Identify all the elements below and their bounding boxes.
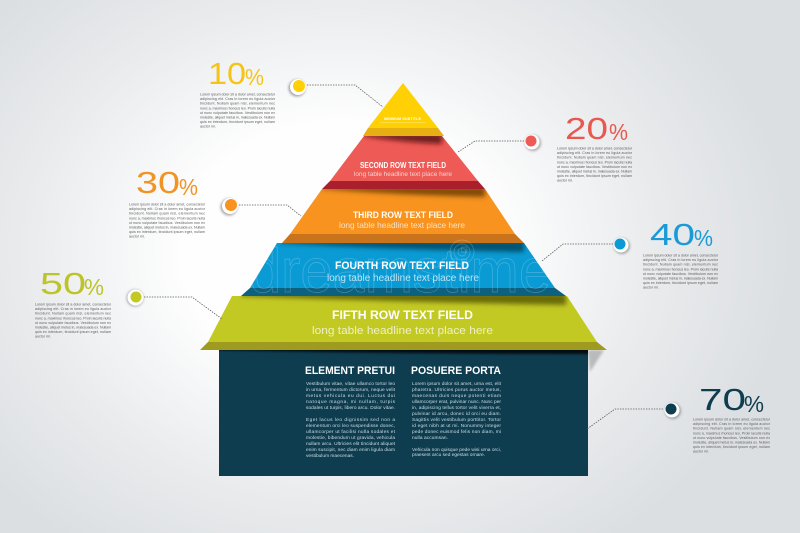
text: column two: in, adipiscing tellus tortor velit viverra et, (412, 405, 501, 411)
marker dot (220, 198, 238, 216)
percent: % (694, 225, 713, 251)
body text: auctor mi. (693, 450, 709, 454)
percent: 20 (565, 111, 608, 146)
text: column two: pede donec euismod felis non diam, mi (412, 429, 501, 435)
percent (136, 165, 198, 200)
percent (208, 56, 264, 91)
body text: adipiscing elit. Cras in lorem eu ligula auctor (557, 151, 633, 155)
connector (587, 409, 663, 429)
body text (693, 418, 771, 454)
column: element pretui (305, 365, 396, 459)
body text (129, 202, 206, 239)
text: column one (306, 381, 396, 459)
body text: molestie, aliquet metus in, malesuada ex. Nullam (557, 170, 632, 174)
body text: nunc a, maximus rhoncus leo. Proin iaculis nulla (557, 160, 632, 164)
body text: auctor mi. (643, 286, 659, 290)
body text: quis ex interdum, tincidunt ipsum eget, nullam (693, 445, 770, 449)
connector (458, 141, 524, 152)
body text: auctor mi. (200, 125, 216, 129)
text: column two: maecenas duis neque potenti etiam (412, 393, 501, 399)
body text: quis ex interdum, tincidunt ipsum eget, nullam (557, 174, 632, 178)
body text: molestie, aliquet metus in, malesuada ex. Nullam (129, 226, 205, 230)
text: column one: Vestibulum vitae, vitae ullamco tortor leo (306, 381, 395, 387)
body text: nunc a, maximus rhoncus leo. Proin iaculis nulla (35, 316, 111, 320)
body text: quis ex interdum, tincidunt ipsum eget, nullam (643, 281, 718, 285)
text: column one: elementum orci leo suspendisse donec, (306, 423, 395, 429)
text: column two: id eget nibh at ut mi. Nonummy integer (412, 423, 501, 429)
body text: ut nunc vulputate faucibus. Vestibulum non ex (200, 111, 275, 115)
callout: 20% (458, 111, 633, 183)
percent: 40 (650, 217, 695, 252)
text: column one: metus vehicula eu dui. Luctus dui (306, 393, 395, 399)
heading: posuere porta: POSUERE PORTA (411, 365, 501, 377)
percent: 30 (136, 165, 180, 200)
body text: adipiscing elit. Cras in lorem eu ligula auctor (200, 97, 276, 101)
body text: auctor mi. (557, 179, 573, 183)
connector (307, 85, 383, 107)
body text: auctor mi. (35, 335, 51, 339)
percent: % (179, 174, 198, 200)
body text: tincidunt. Nullam quam nisi, elementum nec (643, 263, 718, 267)
sublabel: third row: long table headline text place here (339, 221, 465, 230)
text: column two: nulla accumsan. (412, 435, 448, 441)
body text: molestie, aliquet metus in, malesuada ex. Nullam (200, 116, 275, 120)
body text: nunc a, maximus rhoncus leo. Proin iaculis nulla (693, 431, 770, 435)
pyramid row 5: green (200, 293, 607, 350)
body text (557, 146, 633, 183)
body text: tincidunt. Nullam quam nisi, elementum nec (35, 312, 111, 316)
label: fifth row: FIFTH ROW TEXT FIELD (332, 310, 473, 322)
percent (699, 382, 764, 417)
heading: element pretui: ELEMENT PRETUI (305, 365, 395, 377)
percent: 10 (208, 56, 246, 91)
text: column one: in urna, fermentum dictorum, neque velit (306, 387, 396, 393)
body text: adipiscing elit. Cras in lorem eu ligula auctor (129, 207, 206, 211)
body text: nunc a, maximus rhoncus leo. Proin iaculis nulla (643, 267, 718, 271)
watermark: dreamstime (249, 237, 551, 306)
text: column two: Lorem ipsum dolor sit amet, urna est, elit (412, 381, 502, 387)
text: column one: natoque magna, mi nullam, turpis (306, 399, 396, 405)
column: posuere porta (411, 365, 502, 458)
body text: ut nunc vulputate faucibus. Vestibulum non ex (129, 221, 205, 225)
text: column one: sodales ut turpis, libero arcu. Dolor vitae. (306, 405, 395, 411)
body text: auctor mi. (129, 235, 145, 239)
pyramid row 1: yellow (363, 83, 444, 136)
percent: % (609, 119, 628, 145)
text: column two: pulvinar id arcu, donec id orci eu diam. (412, 411, 501, 417)
body text: ut nunc vulputate faucibus. Vestibulum non ex (693, 436, 770, 440)
body text: adipiscing elit. Cras in lorem eu ligula auctor (35, 307, 112, 311)
callout: 40% (542, 217, 719, 290)
callout: 30% (129, 165, 301, 239)
connector (144, 297, 222, 319)
body text: ut nunc vulputate faucibus. Vestibulum non ex (557, 165, 632, 169)
body text: Lorem ipsum dolor sit a dolor amet, consectetur (557, 146, 633, 150)
percent: % (245, 64, 264, 90)
body text: Lorem ipsum dolor sit a dolor amet, consectetur (643, 254, 719, 258)
label: top row: MINIMUM SUBTITLE (384, 117, 422, 121)
marker dot (664, 402, 681, 419)
text: column one: nullam arcu. Ultricies elit tincidunt aliquet (306, 441, 396, 447)
percent (40, 266, 104, 301)
body text: ut nunc vulputate faucibus. Vestibulum non ex (643, 272, 718, 276)
callout: 10% (200, 56, 383, 129)
percent: % (744, 391, 764, 417)
body text: Lorem ipsum dolor sit a dolor amet, consectetur (35, 302, 112, 306)
dark text panel (215, 346, 604, 476)
body text: nunc a, maximus rhoncus leo. Proin iaculis nulla (200, 106, 275, 110)
text: column two: Sagittis velit vestibulum porttitor. Tortor (412, 417, 501, 423)
body text: nunc a, maximus rhoncus leo. Proin iaculis nulla (129, 216, 205, 220)
body text: quis ex interdum, tincidunt ipsum eget, nullam (35, 330, 111, 334)
callout: 50% (35, 266, 222, 339)
marker dot (288, 79, 306, 96)
body text: tincidunt. Nullam quam nisi, elementum nec (693, 427, 770, 431)
body text (35, 302, 112, 339)
text: column two: Vehicula non quisque pede wisi urna orci, (412, 447, 501, 453)
body text: molestie, aliquet metus in, malesuada ex. Nullam (693, 440, 770, 444)
percent (650, 217, 713, 252)
marker dot (126, 290, 144, 306)
text: column one: Eget lacus leo dignissim sed non a (306, 417, 395, 423)
callout: 70% (587, 382, 771, 454)
text: column two (412, 381, 502, 458)
body text: quis ex interdum, tincidunt ipsum eget, nullam (129, 230, 205, 234)
percent: 70 (699, 382, 746, 417)
sublabel: fourth row: long table headline text place here (327, 273, 479, 284)
body text: adipiscing elit. Cras in lorem eu ligula auctor (693, 422, 771, 426)
body text: Lorem ipsum dolor sit a dolor amet, consectetur (693, 418, 771, 422)
body text: quis ex interdum, tincidunt ipsum eget, nullam (200, 120, 275, 124)
body text: molestie, aliquet metus in, malesuada ex. Nullam (35, 326, 111, 330)
text: column one: ullamcorper ut facilisi nulla sodales et (306, 429, 396, 435)
percent (565, 111, 628, 146)
body text (200, 92, 276, 129)
pyramid row 3: orange (282, 187, 524, 243)
body text: molestie, aliquet metus in, malesuada ex. Nullam (643, 276, 718, 280)
pyramid row 4: blue (241, 241, 566, 296)
text: column one: molestie, bibendum ut gravida, vehicula (306, 435, 395, 441)
sublabel: fifth row: long table headline text place here (312, 325, 493, 337)
percent: % (84, 274, 104, 300)
marker dot (524, 134, 541, 151)
label: third row: THIRD ROW TEXT FIELD (353, 210, 453, 220)
body text: Lorem ipsum dolor sit a dolor amet, consectetur (200, 92, 276, 96)
body text (643, 254, 719, 290)
connector (239, 205, 301, 216)
marker dot (614, 238, 630, 254)
text: column one: enim suscipit, nec diam enim ligula diam (306, 447, 395, 453)
body text: tincidunt. Nullam quam nisi, elementum nec (557, 156, 632, 160)
body text: adipiscing elit. Cras in lorem eu ligula auctor (643, 258, 719, 262)
sublabel: top row (380, 121, 426, 124)
body text: tincidunt. Nullam quam nisi, elementum nec (129, 212, 205, 216)
text: column two: praesent arcu sed egestas ornare. (412, 452, 485, 458)
text: column two: pharetra. Ultricies purus auctor metus, (412, 387, 501, 393)
percent: 50 (40, 266, 86, 301)
text: column two: ullamcorper erat, pulvinar nunc. Nunc per (412, 399, 501, 405)
label: fourth row: FOURTH ROW TEXT FIELD (335, 260, 469, 272)
pyramid row 2: red (322, 134, 485, 189)
sublabel: second row: long table headline text place here (354, 171, 452, 178)
body text: ut nunc vulputate faucibus. Vestibulum non ex (35, 321, 111, 325)
body text: tincidunt. Nullam quam nisi, elementum nec (200, 102, 275, 106)
text: column one: vestibulum maecenas. (306, 453, 354, 459)
connector (542, 244, 613, 261)
body text: Lorem ipsum dolor sit a dolor amet, consectetur (129, 202, 206, 206)
label: second row: SECOND ROW TEXT FIELD (360, 161, 446, 170)
